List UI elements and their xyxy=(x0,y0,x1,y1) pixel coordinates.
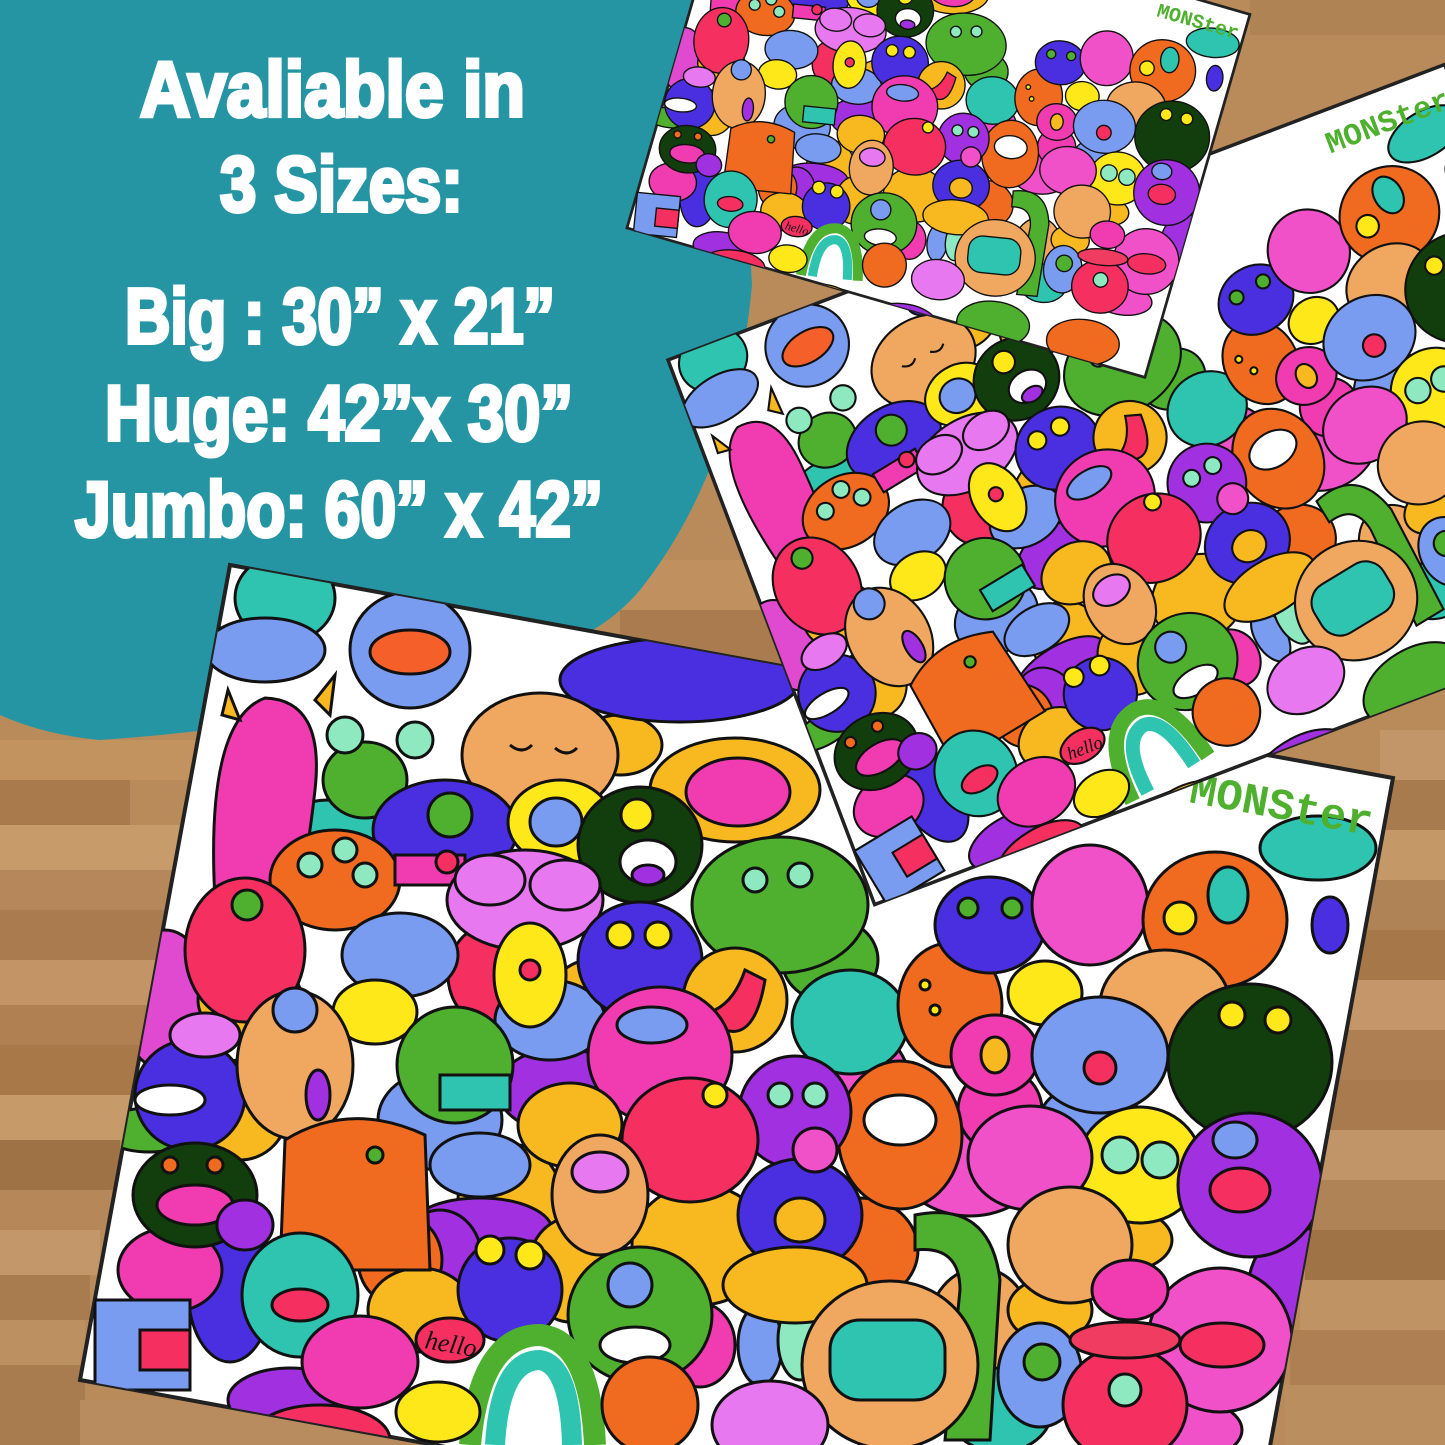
monster: pink small xyxy=(1092,1260,1168,1320)
monster: blue small xyxy=(998,1323,1082,1427)
monster: orange worried xyxy=(838,1061,962,1209)
monster: blue circle xyxy=(350,592,470,708)
hello speech bubble: hello xyxy=(423,1325,479,1363)
size: Huge: Huge: 42”x 30” xyxy=(105,369,573,457)
monster: light blue xyxy=(342,913,458,997)
monster: yellow glasses xyxy=(1078,1107,1202,1223)
monster: purple small eyed xyxy=(458,1236,562,1342)
monster: peach grin xyxy=(1100,950,1230,1060)
monster: yellow blue eye xyxy=(508,780,612,864)
monster: teal horn xyxy=(242,1233,358,1357)
monster: violet scream xyxy=(1148,1268,1292,1412)
heading line: 3 Sizes: 3 Sizes: xyxy=(220,140,463,228)
monster: lilac cloud xyxy=(447,850,603,950)
heading line: Avaliable in: Avaliable in xyxy=(140,45,525,133)
monster: green big xyxy=(692,837,868,973)
monster: pink horned xyxy=(968,1106,1092,1210)
filler: background creatures xyxy=(100,715,1352,1445)
monster: red anemone xyxy=(1063,1322,1187,1445)
monster: teal balloon xyxy=(235,554,335,642)
monster: yellow small xyxy=(333,980,417,1044)
monster: purple small xyxy=(739,1056,851,1168)
monster: orange block xyxy=(280,1119,430,1270)
size: Big: Big : 30” x 21” xyxy=(125,272,555,360)
poster: big xyxy=(617,0,1260,384)
monster: purple small front xyxy=(217,1200,273,1250)
monster: orange sleepy xyxy=(462,693,618,817)
monster: blue sleepy xyxy=(935,877,1045,973)
monster: red dino xyxy=(622,1078,758,1202)
monster: peach square xyxy=(552,1135,648,1255)
monster: off-page row xyxy=(250,1405,1180,1445)
monster: blue purple xyxy=(135,1013,245,1150)
poster: huge xyxy=(574,0,1445,1033)
monster: orange many eyes xyxy=(270,830,400,930)
monster: red long ear xyxy=(185,878,305,1022)
monster: teal cloud xyxy=(1260,816,1376,880)
monster: strawberry stripe xyxy=(395,851,465,885)
monster: pink cyclops xyxy=(588,987,732,1123)
monster: peach fuzzy xyxy=(1008,1187,1132,1303)
monster: green square xyxy=(397,1007,513,1123)
monster: peach tongue xyxy=(237,988,353,1139)
monster: light blue cloud small xyxy=(430,1133,530,1197)
monster: yellow ring xyxy=(650,738,820,842)
hello speech bubble xyxy=(416,1318,484,1363)
monster: peach big horn xyxy=(802,1281,978,1445)
poster: jumbo xyxy=(80,554,1393,1445)
monster: yellow heart balloon xyxy=(494,923,605,1060)
size: Jumbo: Jumbo: 60” x 42” xyxy=(75,465,603,553)
monster: yellow striped arm xyxy=(683,948,787,1052)
monster: dark green xyxy=(1168,984,1332,1140)
monster: periwinkle cloud xyxy=(205,618,325,682)
monster: pink tall xyxy=(214,675,335,920)
monster: teal smile xyxy=(792,970,908,1074)
monster: rainbow xyxy=(470,1335,595,1445)
monster: blue spiral xyxy=(738,1128,862,1271)
monster: orange spotted xyxy=(898,943,1002,1067)
monster: light blue fuzzy heart xyxy=(1032,997,1168,1113)
heading: available sizes xyxy=(75,45,603,553)
teal circle panel xyxy=(0,0,752,740)
monster: yellow spiky xyxy=(518,1083,622,1167)
monster: pink donut xyxy=(951,1015,1039,1095)
monster: violet bottom xyxy=(712,1381,828,1445)
monster: yellow bottom xyxy=(396,1382,480,1442)
monster: dark wide mouth xyxy=(133,1143,257,1247)
monster: purple screaming xyxy=(1178,1113,1322,1257)
monster: green blob xyxy=(323,717,433,818)
monster: orange bottom xyxy=(602,1357,698,1445)
monster: yellow cloud xyxy=(723,1247,867,1323)
monster: purple fuzzy xyxy=(578,902,702,1018)
monster: blue one eye xyxy=(373,780,517,880)
monster: purple cloud xyxy=(560,638,800,722)
monster: pink smile xyxy=(1032,845,1148,965)
monster: dark green fuzzy xyxy=(578,787,702,903)
monster: orange droplet xyxy=(1143,852,1287,988)
monster: periwinkle block xyxy=(95,1300,190,1390)
monster title: MONSter xyxy=(1185,767,1376,849)
monster: green dino neck xyxy=(915,1213,1000,1440)
monster: yellow small grin xyxy=(1008,961,1082,1025)
monster: pink dino xyxy=(302,1316,418,1408)
monster: green mouth xyxy=(568,1247,712,1383)
